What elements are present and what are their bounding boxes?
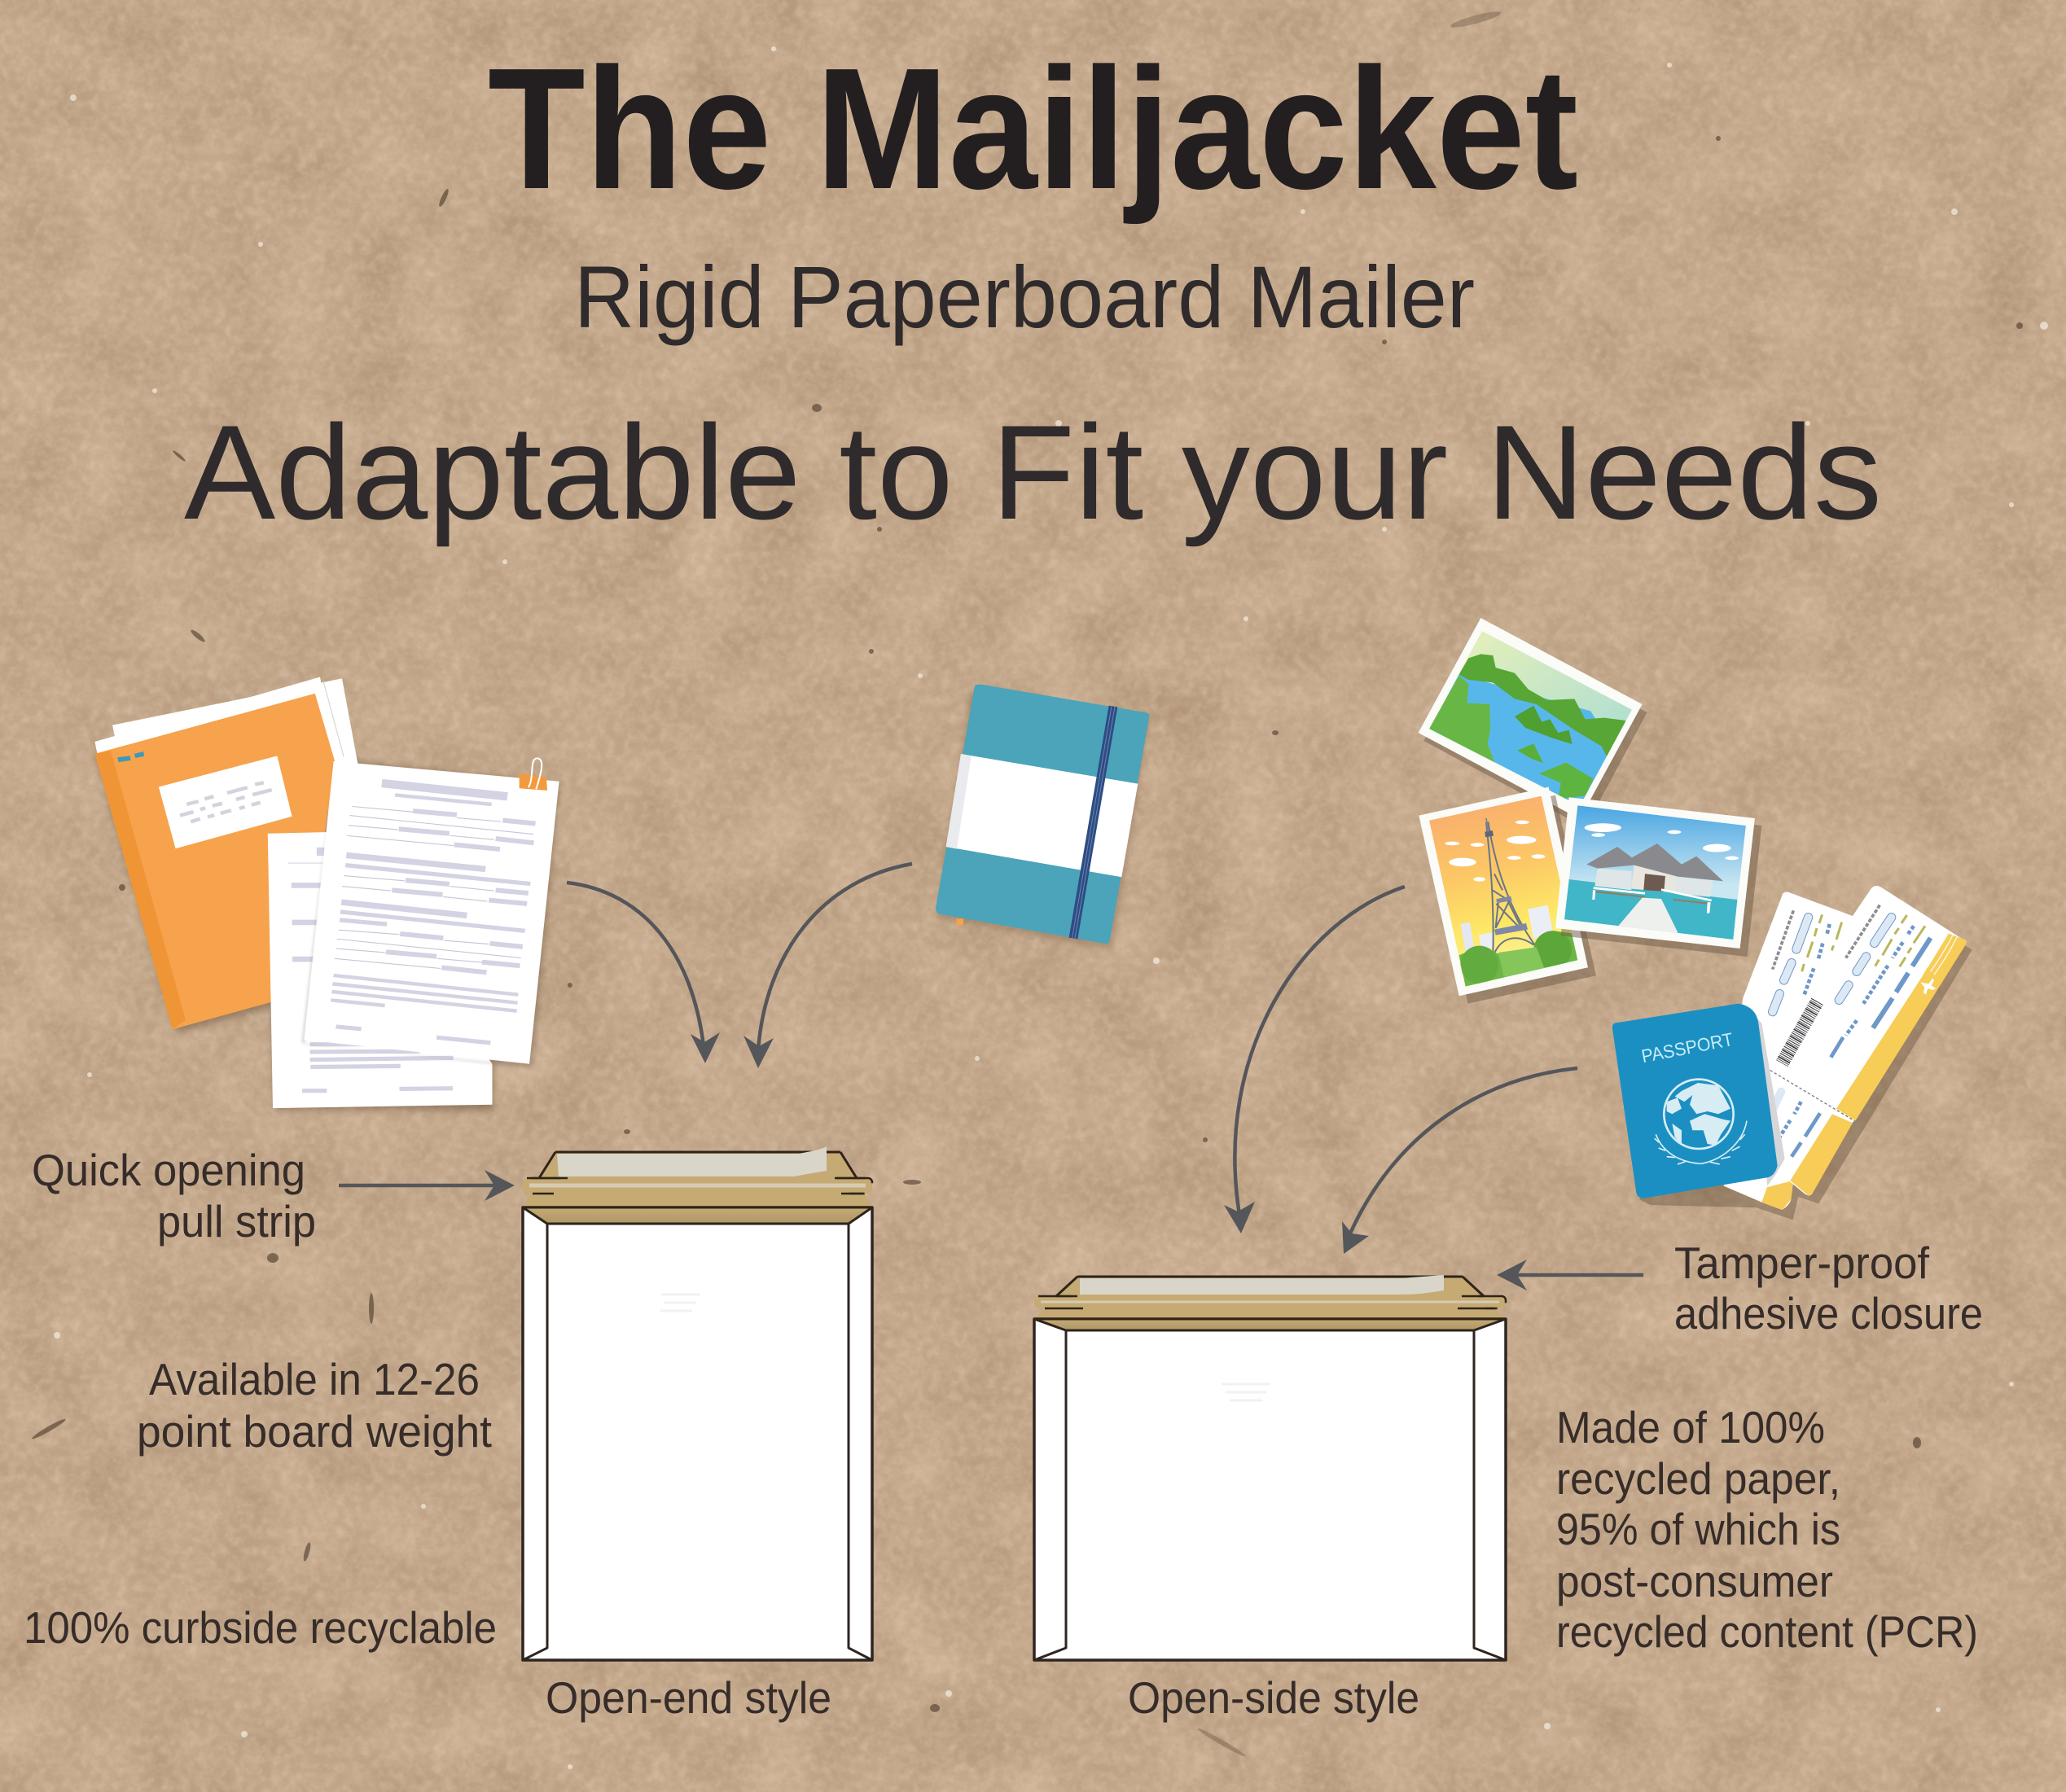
photo: overwater villa <box>1555 797 1761 957</box>
photo: Eiffel tower <box>1419 787 1596 1004</box>
label: recycled content: Made of 100% <box>1556 1402 1825 1452</box>
arrow: passport to open-side envelope <box>1342 1068 1577 1254</box>
label: recycled content: post-consumer <box>1556 1556 1833 1606</box>
label: recycled content <box>1556 1402 1978 1657</box>
front sheet <box>305 761 559 1064</box>
label: open-side style: Open-side style <box>1128 1672 1419 1723</box>
arrow: photos to open-side envelope <box>1224 887 1405 1233</box>
title: The Mailjacket <box>488 32 1578 225</box>
label: board weight: point board weight <box>137 1406 492 1457</box>
label: tamper-proof closure <box>1674 1238 1983 1339</box>
label: recycled content: recycled paper, <box>1556 1453 1840 1504</box>
passport label: PASSPORT <box>1639 1028 1735 1067</box>
icon: boarding passes and passport <box>1612 886 1972 1220</box>
arrow: notebook to open-end envelope <box>743 864 912 1068</box>
binder clip <box>520 773 547 791</box>
passport <box>1612 1004 1785 1198</box>
label: tamper-proof closure: adhesive closure <box>1674 1288 1983 1339</box>
icon: notebook <box>936 685 1150 950</box>
label: quick opening pull strip <box>32 1145 316 1247</box>
back sheet <box>268 832 492 1108</box>
arrow: tamper-proof closure pointer <box>1497 1260 1643 1290</box>
label: recycled content: recycled content (PCR) <box>1556 1606 1978 1657</box>
label: open-end style: Open-end style <box>546 1672 831 1723</box>
passport globe <box>1664 1080 1734 1149</box>
label: board weight: Available in 12-26 <box>149 1354 480 1404</box>
headline: Adaptable to Fit your Needs <box>184 397 1882 547</box>
photo: bay landscape <box>1419 618 1647 828</box>
envelope: open-end style <box>523 1146 872 1660</box>
envelope: open-side style <box>1034 1275 1506 1660</box>
label: recycled content: 95% of which is <box>1556 1504 1840 1554</box>
boarding pass: right <box>1761 886 1967 1196</box>
subtitle: Rigid Paperboard Mailer <box>574 248 1475 346</box>
label: curbside recyclable: 100% curbside recyclable <box>24 1602 497 1653</box>
arrow: quick opening strip pointer <box>339 1170 515 1201</box>
icon: folder and documents <box>94 677 559 1111</box>
arrow: folder to open-end envelope <box>567 883 720 1063</box>
label: quick opening pull strip: pull strip <box>157 1196 316 1247</box>
label: tamper-proof closure: Tamper-proof <box>1674 1238 1930 1288</box>
boarding pass: left <box>1724 892 1853 1210</box>
icon: travel photos <box>1419 618 1761 1004</box>
label: quick opening pull strip: Quick opening <box>32 1145 305 1195</box>
label: board weight <box>137 1354 492 1457</box>
